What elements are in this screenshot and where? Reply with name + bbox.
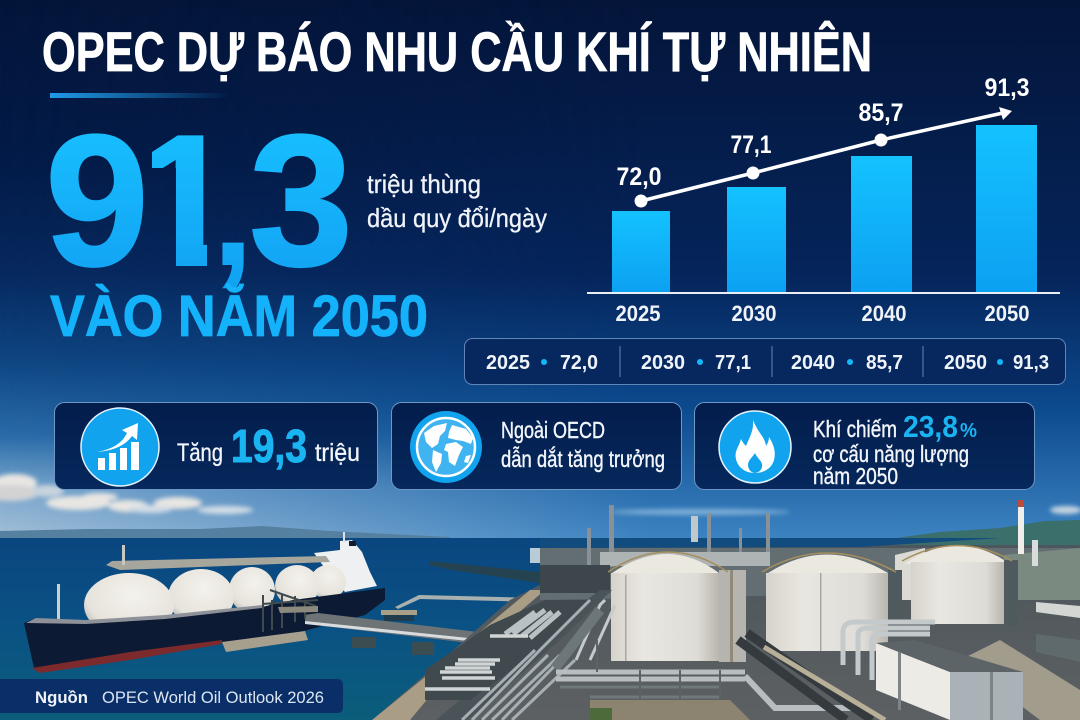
data strip: 85,7	[866, 352, 903, 374]
jetty	[222, 548, 550, 655]
year labels: 2025	[616, 301, 660, 326]
refinery towers	[540, 505, 770, 593]
icon: rising bar chart	[81, 408, 159, 486]
headline unit: dầu quy đổi/ngày	[367, 203, 547, 233]
LNG carrier ship	[24, 532, 385, 673]
headline subtitle: VÀO NĂM 2050	[50, 284, 428, 349]
white block building	[876, 640, 1023, 720]
storage tank 3	[895, 546, 1018, 626]
sea	[0, 538, 640, 720]
card: outside OECD: Ngoài OECD	[501, 417, 605, 443]
pipework	[425, 590, 935, 720]
data strip: 2050	[944, 352, 987, 374]
value labels: 91,3	[984, 74, 1030, 102]
card: gas share: Khí chiếm	[813, 416, 897, 442]
card: gas share	[694, 402, 1034, 490]
ship deck rail	[106, 556, 330, 570]
ship hull	[24, 588, 385, 671]
year labels: 2050	[984, 301, 1030, 326]
card: increase: triệu	[315, 439, 360, 467]
card: increase: Tăng	[177, 439, 223, 467]
data strip: 2040	[791, 352, 835, 374]
data strip: 2025	[486, 352, 530, 374]
card: gas share: năm 2050	[813, 463, 898, 489]
clouds	[0, 474, 1080, 515]
source bar: Nguồn	[35, 688, 88, 707]
year labels: 2030	[732, 301, 776, 326]
value labels: 85,7	[858, 99, 904, 127]
value labels: 72,0	[616, 163, 662, 191]
data strip: 91,3	[1013, 352, 1049, 374]
card: gas share: %	[960, 420, 977, 442]
chimney stack	[1018, 500, 1038, 566]
background: night-to-day sky	[0, 68, 1080, 538]
headline number	[50, 133, 348, 288]
card: outside OECD: dẫn dắt tăng trưởng	[501, 446, 665, 472]
ground pads	[590, 602, 1080, 720]
year labels	[616, 301, 1030, 326]
card: increase: 19,3	[231, 420, 307, 472]
year labels: 2040	[862, 301, 906, 326]
source bar: OPEC World Oil Outlook 2026	[102, 688, 324, 707]
data strip	[464, 338, 1066, 384]
ship spherical tanks	[84, 565, 346, 637]
value labels: 77,1	[730, 131, 772, 159]
ship superstructure	[314, 532, 377, 592]
distant hills	[0, 520, 1080, 548]
storage tank 2	[762, 553, 902, 651]
headline number: 1	[133, 96, 237, 305]
axis	[587, 292, 1060, 294]
bars	[612, 125, 1037, 293]
title accent rule	[50, 93, 230, 98]
card: outside OECD	[392, 402, 682, 490]
refinery land	[372, 538, 1080, 720]
card: gas share: cơ cấu năng lượng	[813, 441, 969, 467]
icon: flame	[719, 411, 791, 483]
headline unit	[367, 169, 547, 233]
headline unit: triệu thùng	[367, 169, 481, 199]
bar chart with trend line	[587, 74, 1060, 326]
headline number: 3	[249, 96, 353, 305]
headline number: 9	[45, 96, 149, 305]
trend arrow	[634, 107, 1012, 208]
source bar	[0, 679, 343, 713]
data strip: 77,1	[715, 352, 751, 374]
data strip: 72,0	[560, 352, 598, 374]
icon: globe	[410, 411, 482, 483]
storage tank 1	[608, 552, 746, 662]
value labels	[616, 74, 1030, 191]
headline number: ,	[212, 129, 254, 297]
data strip: 2030	[641, 352, 685, 374]
card: increase	[54, 402, 378, 490]
card: gas share: 23,8	[903, 409, 958, 444]
